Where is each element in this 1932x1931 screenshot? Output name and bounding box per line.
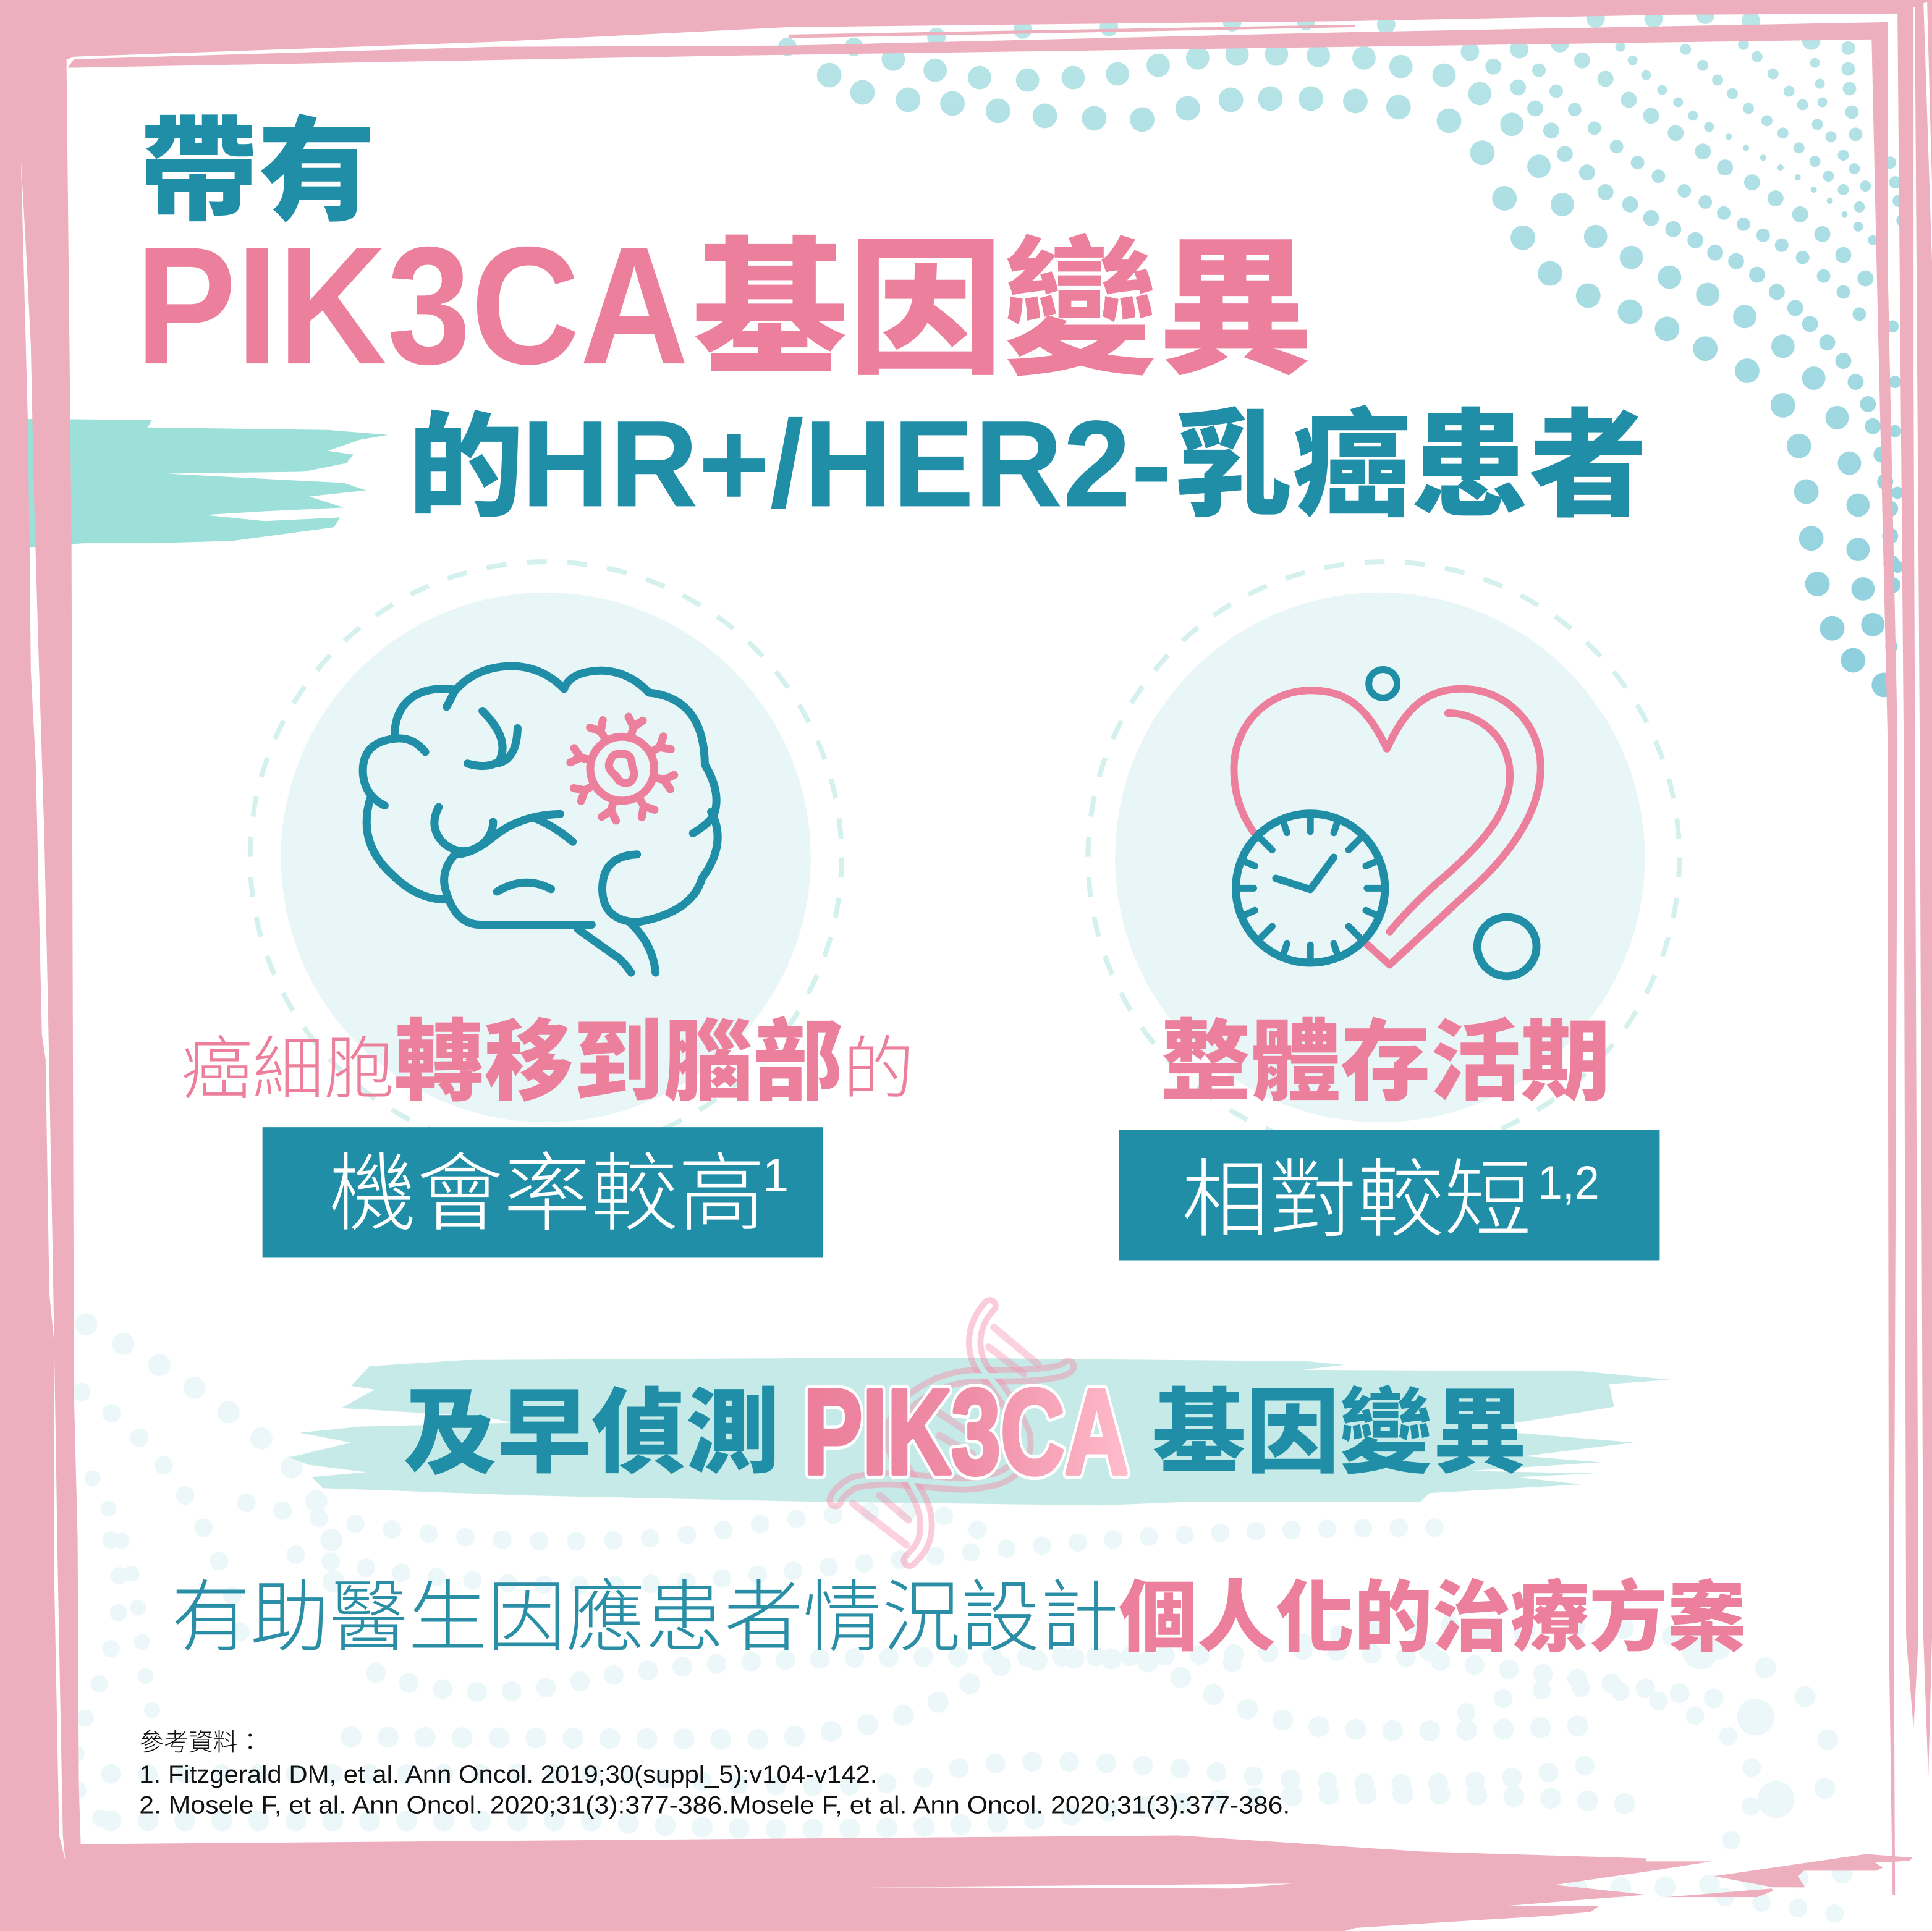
callout keyword: PIK3CA (803, 1364, 1129, 1499)
icon: heart (1234, 689, 1541, 965)
title line 2 (135, 213, 1313, 399)
left result box: 1 (763, 1149, 789, 1202)
circle backdrop right (1115, 593, 1645, 1122)
dot pattern: top right (787, 15, 1902, 685)
conclusion line (171, 1573, 1746, 1661)
callout heading: 及早偵測 (403, 1381, 780, 1484)
right heading: 整體存活期 (1161, 1013, 1611, 1112)
title line 2: 基因變異 (692, 227, 1313, 392)
left heading: 癌細胞 (181, 1030, 396, 1107)
conclusion line: 有助醫生因應患者情況設計 (171, 1573, 1119, 1661)
left heading (181, 1013, 914, 1112)
brush stroke: callout (290, 1358, 1671, 1505)
conclusion line: 個人化的治療方案 (1119, 1574, 1746, 1661)
left heading: 的 (843, 1030, 914, 1107)
icon: dna (836, 1306, 1068, 1560)
title line 2: PIK3CA (135, 213, 688, 399)
panel: overall survival (1088, 562, 1679, 1260)
references: 2. Mosele F, et al. Ann Oncol. 2020;31(3):377-386.Mosele F, et al. Ann Oncol. 2020;31(3):377-386. (139, 1792, 1290, 1819)
callout heading (403, 1364, 1527, 1499)
icon: brain (363, 666, 718, 973)
title line 3: HR+/HER2- (521, 395, 1172, 533)
callout keyword: PIK3CA (803, 1364, 1129, 1499)
icon: small circle (1369, 670, 1397, 698)
right result box: 相對較短 (1182, 1153, 1532, 1248)
references (139, 1729, 1290, 1819)
title line 3 (408, 395, 1647, 533)
callout heading: 基因變異 (1152, 1381, 1527, 1484)
icon: clock (1236, 814, 1385, 963)
title line 3: 乳癌患者 (1174, 401, 1647, 531)
right result box: 1,2 (1538, 1157, 1599, 1209)
references: 1. Fitzgerald DM, et al. Ann Oncol. 2019;30(suppl_5):v104-v142. (139, 1761, 877, 1788)
right result box (1119, 1130, 1659, 1260)
dot pattern: bottom faint (75, 1324, 1848, 1916)
panel: brain metastasis (181, 562, 914, 1257)
dashed ring right (1088, 562, 1679, 1153)
circle backdrop left (281, 593, 811, 1122)
title (135, 108, 1647, 533)
title line 1: 帶有 (139, 108, 376, 235)
left result box (263, 1127, 823, 1257)
title line 3: 的 (408, 404, 523, 530)
references: 參考資料： (139, 1729, 263, 1756)
brush stroke: title accent (25, 419, 388, 548)
dashed ring left (250, 562, 842, 1153)
icon: cancer cell (570, 717, 674, 821)
icon: large circle (1477, 917, 1536, 976)
left heading: 轉移到腦部 (394, 1013, 843, 1112)
left result box: 機會率較高 (329, 1147, 765, 1242)
